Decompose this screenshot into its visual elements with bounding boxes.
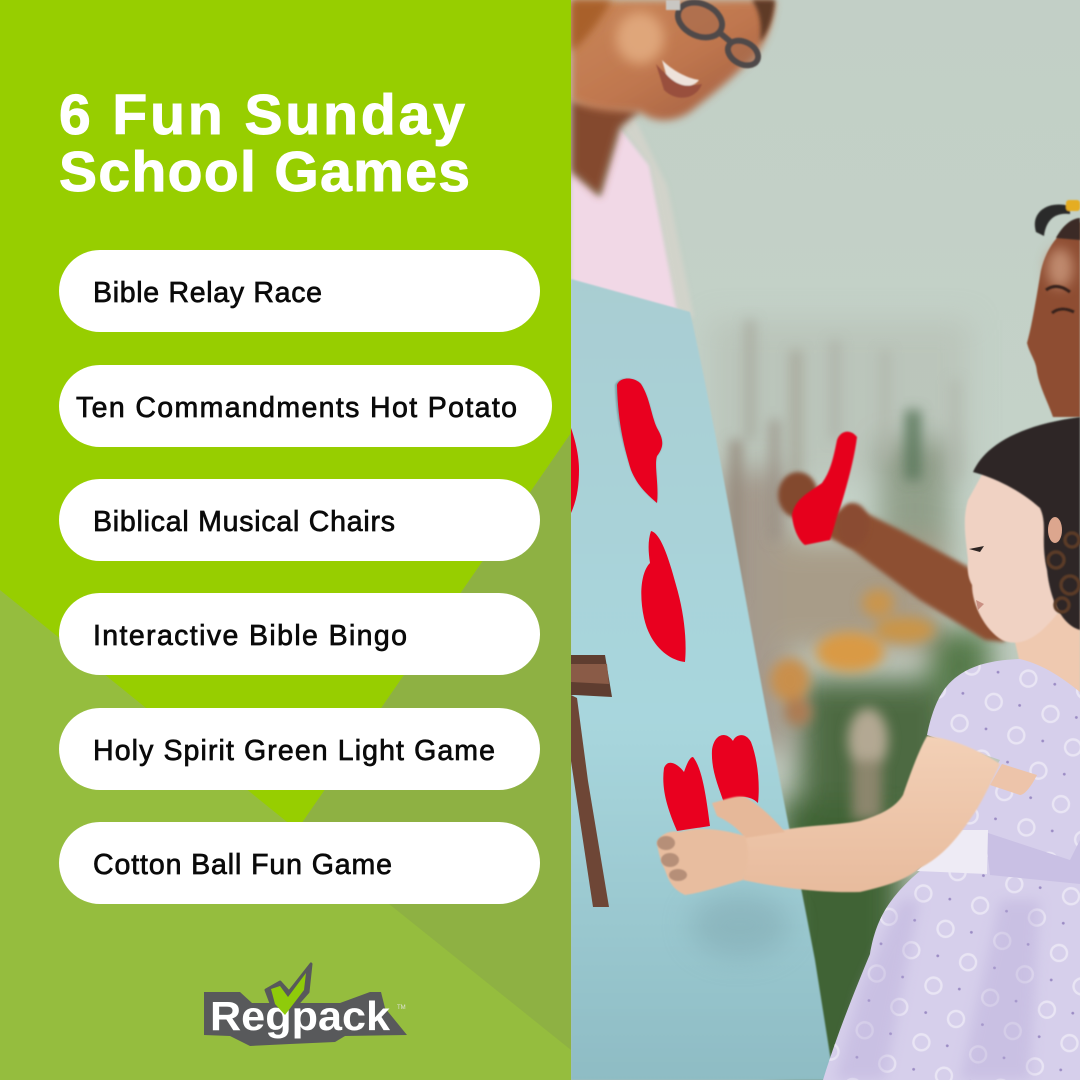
knuckles in shade: [657, 836, 687, 881]
dress sash: [985, 832, 1080, 884]
title: 6 Fun Sunday: [59, 83, 465, 147]
game pill: Ten Commandments Hot Potato: [59, 365, 552, 447]
photo: children placing felt hearts on a board: [571, 0, 1080, 1080]
game pill: Cotton Ball Fun Game: Cotton Ball Fun Game: [93, 849, 392, 881]
game pill: Holy Spirit Green Light Game: Holy Spirit Green Light Game: [93, 735, 495, 767]
woman's pink shirt: [571, 128, 680, 312]
forehead highlight: [1047, 248, 1073, 288]
arm: [743, 736, 1000, 892]
girl's hand: [778, 472, 818, 518]
ear: [1048, 517, 1062, 543]
back opening: [990, 764, 1037, 795]
brown felt cross: [571, 655, 612, 907]
game pill: Interactive Bible Bingo: [59, 593, 540, 675]
smile: [656, 60, 702, 98]
little girl's face: [965, 460, 1060, 643]
dress: [823, 659, 1080, 1080]
shadow on the felt below the hand: [690, 893, 790, 957]
front hand: [657, 829, 748, 895]
mouth: [976, 600, 984, 610]
blurred branches and foliage: [710, 320, 990, 1080]
dress shading: [835, 900, 1040, 1080]
girl's arm: [810, 505, 1005, 642]
woman's grey cardigan: [624, 119, 692, 315]
woman's face: [571, 0, 775, 120]
logo: Regpack: Regpack: [210, 993, 390, 1039]
game pill: Cotton Ball Fun Game: [59, 822, 540, 904]
game pill: Bible Relay Race: Bible Relay Race: [93, 277, 322, 309]
woman behind the board: [571, 0, 775, 318]
game pill: Ten Commandments Hot Potato: Ten Commandments Hot Potato: [76, 392, 517, 424]
red felt hearts on the board: [571, 378, 759, 831]
little girl's hair: [973, 417, 1080, 630]
game pill: Biblical Musical Chairs: Biblical Musical Chairs: [93, 506, 395, 538]
little girl in lavender dress: [657, 417, 1080, 1080]
logo: Regpack: TM: [397, 1005, 406, 1011]
eye: [969, 546, 984, 552]
hair at right temple: [752, 0, 775, 42]
blurred wall background: [571, 0, 1080, 1080]
title: School Games: [59, 140, 470, 204]
white waist band: [917, 830, 988, 874]
curls: [1048, 533, 1079, 612]
older girl in the background: [778, 200, 1080, 642]
glasses: [666, 0, 762, 70]
game pill: Holy Spirit Green Light Game: [59, 708, 540, 790]
title: [59, 83, 470, 204]
logo: Regpack: [204, 964, 407, 1046]
game pill: Bible Relay Race: [59, 250, 540, 332]
blue felt board: [571, 279, 834, 1080]
panel: green background with geometric shapes: [0, 0, 571, 1080]
girl's eye: [1046, 286, 1074, 313]
highlight on cheek: [616, 12, 664, 64]
red felt heart in hand: [792, 432, 857, 545]
woman's hair: [571, 0, 612, 52]
girl's fingers on heart: [837, 503, 869, 547]
upper hand: [712, 797, 785, 838]
girl's hair bun and band: [1035, 200, 1080, 240]
little girl's neck and back: [1014, 610, 1080, 692]
woman's neck and chest: [571, 100, 640, 197]
girl's face: [1027, 222, 1080, 417]
list of six games: [59, 250, 552, 904]
game pill: Biblical Musical Chairs: [59, 479, 540, 561]
game pill: Interactive Bible Bingo: Interactive Bible Bingo: [93, 620, 407, 652]
